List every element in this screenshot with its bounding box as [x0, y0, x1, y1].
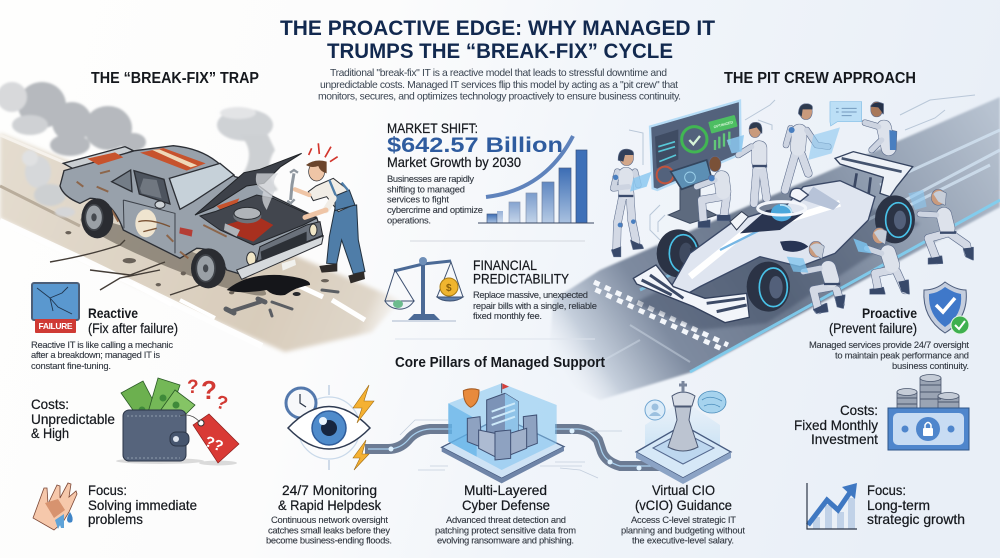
pillar: monitoring: catches small leaks before they: [268, 524, 390, 536]
icon: castle on platform: [442, 383, 564, 483]
costs right: Fixed Monthly: [794, 418, 878, 433]
smoke clouds: [0, 82, 278, 217]
road: break-fix scene: [0, 133, 400, 352]
icon: eye with clock: [286, 385, 374, 470]
crew: standing tablet: [738, 123, 767, 203]
financial predictability: Replace massive, unexpected: [473, 289, 588, 300]
focus right: strategic growth: [867, 512, 965, 527]
front: [257, 222, 323, 262]
market shift stat: Businesses are rapidly: [387, 173, 474, 184]
pillar: cyber defense: Cyber Defense: [462, 498, 550, 513]
focus right: Long-term: [867, 498, 930, 513]
costs left: Unpredictable: [31, 412, 115, 427]
car: [60, 146, 329, 305]
dashboard console: OPTIMIZED: [713, 120, 734, 129]
costs right: Investment: [811, 432, 878, 447]
market shift stat: shifting to managed: [387, 184, 465, 194]
pit crew: [612, 102, 897, 257]
hood: [195, 153, 302, 215]
circuit traces: [629, 95, 975, 240]
focus right: Focus:: [867, 483, 906, 498]
intro paragraph: [318, 68, 681, 102]
rubble: [65, 231, 329, 296]
proactive text: (Prevent failure): [829, 321, 917, 336]
focus left: [88, 483, 197, 527]
body: [669, 181, 875, 299]
icon: shield: [924, 282, 969, 334]
pillar: monitoring: [266, 483, 392, 546]
rear wheel: [875, 195, 915, 243]
heading: break-fix trap: THE “BREAK-FIX” TRAP: [91, 70, 259, 87]
proactive text: business continuity.: [892, 360, 969, 371]
dashboard console: [650, 101, 741, 223]
intro paragraph: monitors, secures, and optimizes technology proactively to ensure business continuity.: [318, 92, 681, 102]
mechanic: [287, 143, 365, 283]
road cracks: [50, 240, 200, 295]
reactive text: [31, 306, 178, 371]
crew: middle kneeling: [867, 228, 909, 294]
crew: kneeling console: [697, 157, 731, 227]
reactive text: Reactive IT is like calling a mechanic: [31, 339, 173, 350]
icon: scales: $: [446, 283, 452, 294]
costs right: [794, 403, 878, 447]
icon: growth chart: [807, 483, 857, 529]
tools on ground: [226, 290, 338, 316]
proactive text: Proactive: [862, 306, 917, 321]
market shift stat: operations.: [387, 214, 431, 226]
icon: bandaged hand with drips: [33, 483, 77, 530]
growth bar chart: [478, 136, 594, 223]
costs right: Costs:: [840, 403, 878, 418]
costs left: [31, 397, 115, 441]
focus left: Focus:: [88, 483, 127, 498]
focus right: [867, 483, 965, 527]
track: [548, 97, 1000, 400]
pillar: vCIO: Access C-level strategic IT: [631, 514, 736, 525]
pillar: vCIO: (vCIO) Guidance: [635, 498, 732, 513]
financial predictability: repair bills with a single, reliable: [473, 300, 597, 311]
engine bay: [200, 195, 317, 245]
crew: standing tall: [785, 104, 828, 190]
crew: standing left: [612, 149, 643, 257]
icon: cracked monitor failure: FAILURE: [38, 321, 73, 331]
market shift stat: $642.57 Billion: [387, 134, 563, 157]
rear wing: [835, 152, 913, 197]
financial predictability: PREDICTABILITY: [473, 272, 569, 286]
reactive text: constant fine-tuning.: [31, 360, 111, 371]
icon: wallet with bills and price tag: ?: [213, 392, 230, 415]
front wing: [633, 265, 749, 323]
pillar: monitoring: become business-ending floods.: [266, 534, 392, 546]
heading: core pillars: Core Pillars of Managed Support: [395, 355, 605, 371]
pillar: cyber defense: Multi-Layered: [464, 483, 547, 498]
connector paths: [365, 420, 660, 478]
pillar: vCIO: [621, 483, 745, 546]
proactive text: to maintain peak performance and: [835, 350, 969, 360]
message card: [830, 102, 862, 126]
title: THE PROACTIVE EDGE: WHY MANAGED IT: [280, 17, 715, 40]
pillar: vCIO: planning and budgeting without: [621, 524, 745, 536]
reactive text: (Fix after failure): [88, 321, 178, 336]
crew: front kneeling: [803, 242, 845, 313]
intro paragraph: unpredictable costs. Managed IT services flip this model by acting as a "pit crew" that: [320, 80, 678, 91]
dividers: [410, 240, 585, 242]
reactive text: after a breakdown; managed IT is: [31, 349, 160, 360]
crew: right kneeling: [920, 190, 973, 264]
market shift stat: MARKET SHIFT:: [387, 121, 478, 136]
pillar: monitoring: 24/7 Monitoring: [282, 483, 377, 498]
icon: wallet with bills and price tag: ??: [202, 433, 225, 455]
icon: chess king on platform: [636, 381, 731, 484]
icon: coins and banknote: [888, 374, 969, 450]
pillar: cyber defense: evolving ransomware and phishing.: [437, 534, 574, 546]
pillar: vCIO: Virtual CIO: [652, 483, 715, 498]
financial predictability: [473, 258, 597, 321]
front-right wheel: [747, 262, 790, 312]
crew: top right: [865, 102, 897, 150]
checkered line: [590, 282, 728, 350]
icon: cracked monitor failure: [32, 283, 79, 333]
title: [280, 17, 715, 63]
pillar: cyber defense: [435, 483, 576, 546]
market shift stat: cybercrime and optimize: [387, 204, 483, 215]
proactive text: Managed services provide 24/7 oversight: [809, 339, 969, 350]
financial predictability: FINANCIAL: [473, 258, 537, 273]
pillar: cyber defense: patching protect sensitive data from: [435, 524, 576, 536]
front-left wheel: [657, 229, 700, 277]
title: TRUMPS THE “BREAK-FIX” CYCLE: [327, 40, 673, 63]
market shift stat: services to fight: [387, 194, 449, 204]
focus left: problems: [88, 512, 143, 527]
reactive text: Reactive: [88, 306, 138, 321]
icon: wallet with bills and price tag: ?: [201, 375, 217, 405]
crew kneeling group: [787, 190, 973, 313]
heading: pit crew: THE PIT CREW APPROACH: [724, 70, 916, 87]
F1 car: [633, 152, 920, 330]
intro paragraph: Traditional "break-fix" IT is a reactive model that leads to stressful downtime and: [330, 68, 667, 79]
pillar: vCIO: the executive-level salary.: [632, 534, 734, 546]
financial predictability: fixed monthly fee.: [473, 310, 542, 321]
proactive text: [809, 306, 969, 371]
icon: wallet with bills and price tag: ?: [187, 377, 199, 398]
costs left: Costs:: [31, 397, 69, 412]
wheels: [81, 198, 113, 238]
costs left: & High: [31, 426, 69, 441]
pillar: cyber defense: Advanced threat detection and: [446, 514, 566, 525]
focus left: Solving immediate: [88, 498, 197, 513]
pillar: monitoring: Continuous network oversight: [271, 514, 388, 525]
icon: wallet with bills and price tag: [116, 375, 239, 466]
icon: scales: [385, 257, 463, 321]
pillar: monitoring: & Rapid Helpdesk: [278, 498, 381, 513]
market shift stat: Market Growth by 2030: [387, 155, 521, 170]
market shift stat: [387, 121, 563, 226]
